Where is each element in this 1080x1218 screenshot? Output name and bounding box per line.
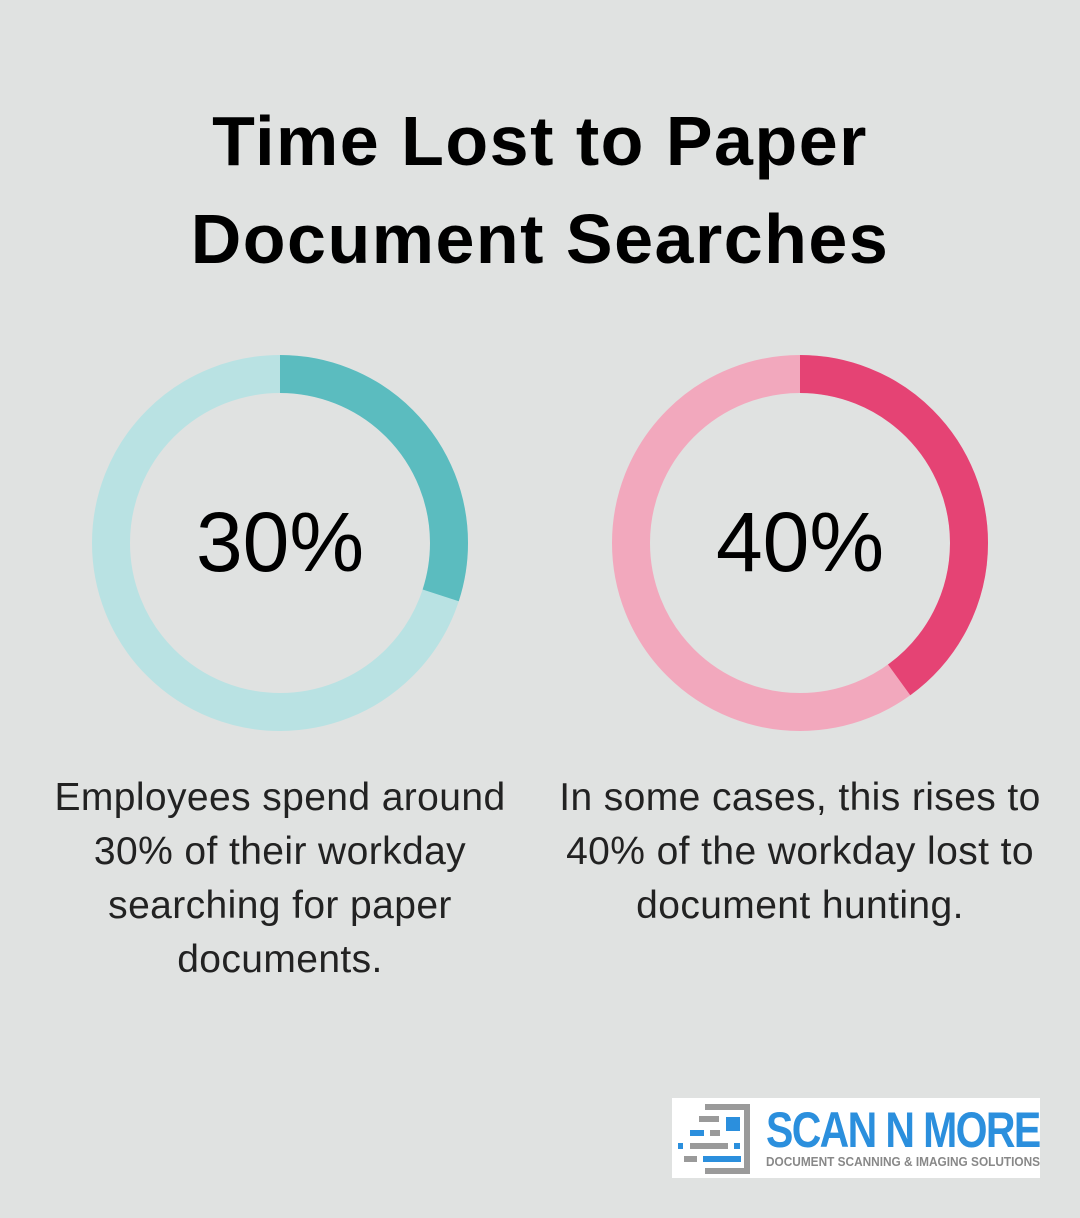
text block: left description: 30% of their workday xyxy=(94,830,466,873)
logo: DOCUMENT SCANNING & IMAGING SOLUTIONS xyxy=(766,1154,1040,1169)
title: Time Lost to Paper xyxy=(212,102,868,180)
text block: left description: searching for paper xyxy=(108,884,452,927)
chart: 30% donut: 30% xyxy=(196,495,364,589)
icon: scanner xyxy=(678,1104,750,1174)
logo: SCAN N MORE xyxy=(766,1102,1040,1158)
logo xyxy=(672,1098,1040,1178)
chart: 40% donut: 40% xyxy=(716,495,884,589)
title: Document Searches xyxy=(191,200,889,278)
text block: right description: document hunting. xyxy=(636,884,964,927)
text block: right description: 40% of the workday lost to xyxy=(566,830,1034,873)
text block: right description: In some cases, this rises to xyxy=(559,776,1041,819)
text block: left description xyxy=(54,776,506,981)
text block: left description: documents. xyxy=(177,938,383,981)
text block: left description: Employees spend around xyxy=(54,776,506,819)
text block: right description xyxy=(559,776,1041,927)
title xyxy=(191,102,889,278)
chart: 40% donut xyxy=(612,355,988,731)
chart: 30% donut xyxy=(92,355,468,731)
